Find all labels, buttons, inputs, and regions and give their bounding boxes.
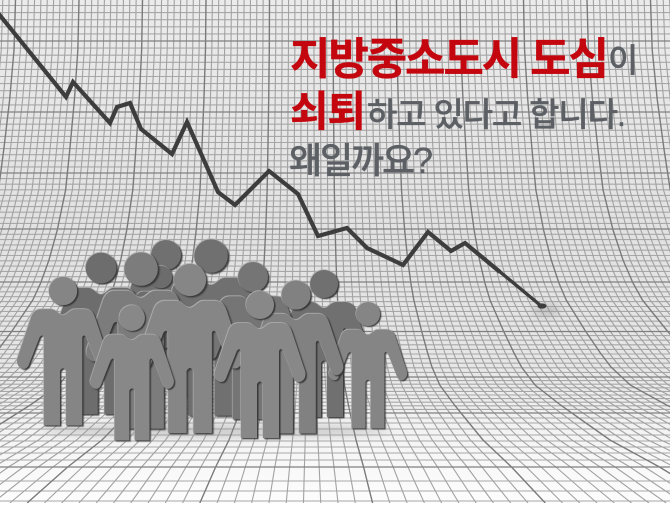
ground shadow under people (40, 424, 390, 438)
heading line 1: 지방중소도시 도심 (290, 35, 609, 84)
person: front right (214, 291, 306, 438)
person: back head (117, 240, 215, 397)
person: small far right (329, 302, 407, 428)
heading line 2 grey: 하고 있다고 합니다. (367, 96, 626, 133)
heading line 1 suffix: 이 (608, 42, 638, 79)
person: front centre large (138, 264, 242, 433)
line chart: declining trend (0, 13, 560, 316)
title: red and grey Korean heading (289, 35, 638, 181)
person: back small head (125, 266, 197, 383)
heading line 2 red: 쇠퇴 (290, 88, 366, 135)
person: back left (51, 253, 151, 414)
person: front child (90, 305, 174, 440)
person: back right (278, 270, 370, 417)
person: front left (17, 277, 109, 425)
heading line 3: 왜일까요? (289, 140, 433, 181)
person: middle right (204, 262, 302, 419)
person: middle left (86, 252, 196, 429)
icon: group of people (17, 239, 407, 440)
person: back centre right (156, 239, 266, 416)
person: behind front right (249, 280, 343, 433)
